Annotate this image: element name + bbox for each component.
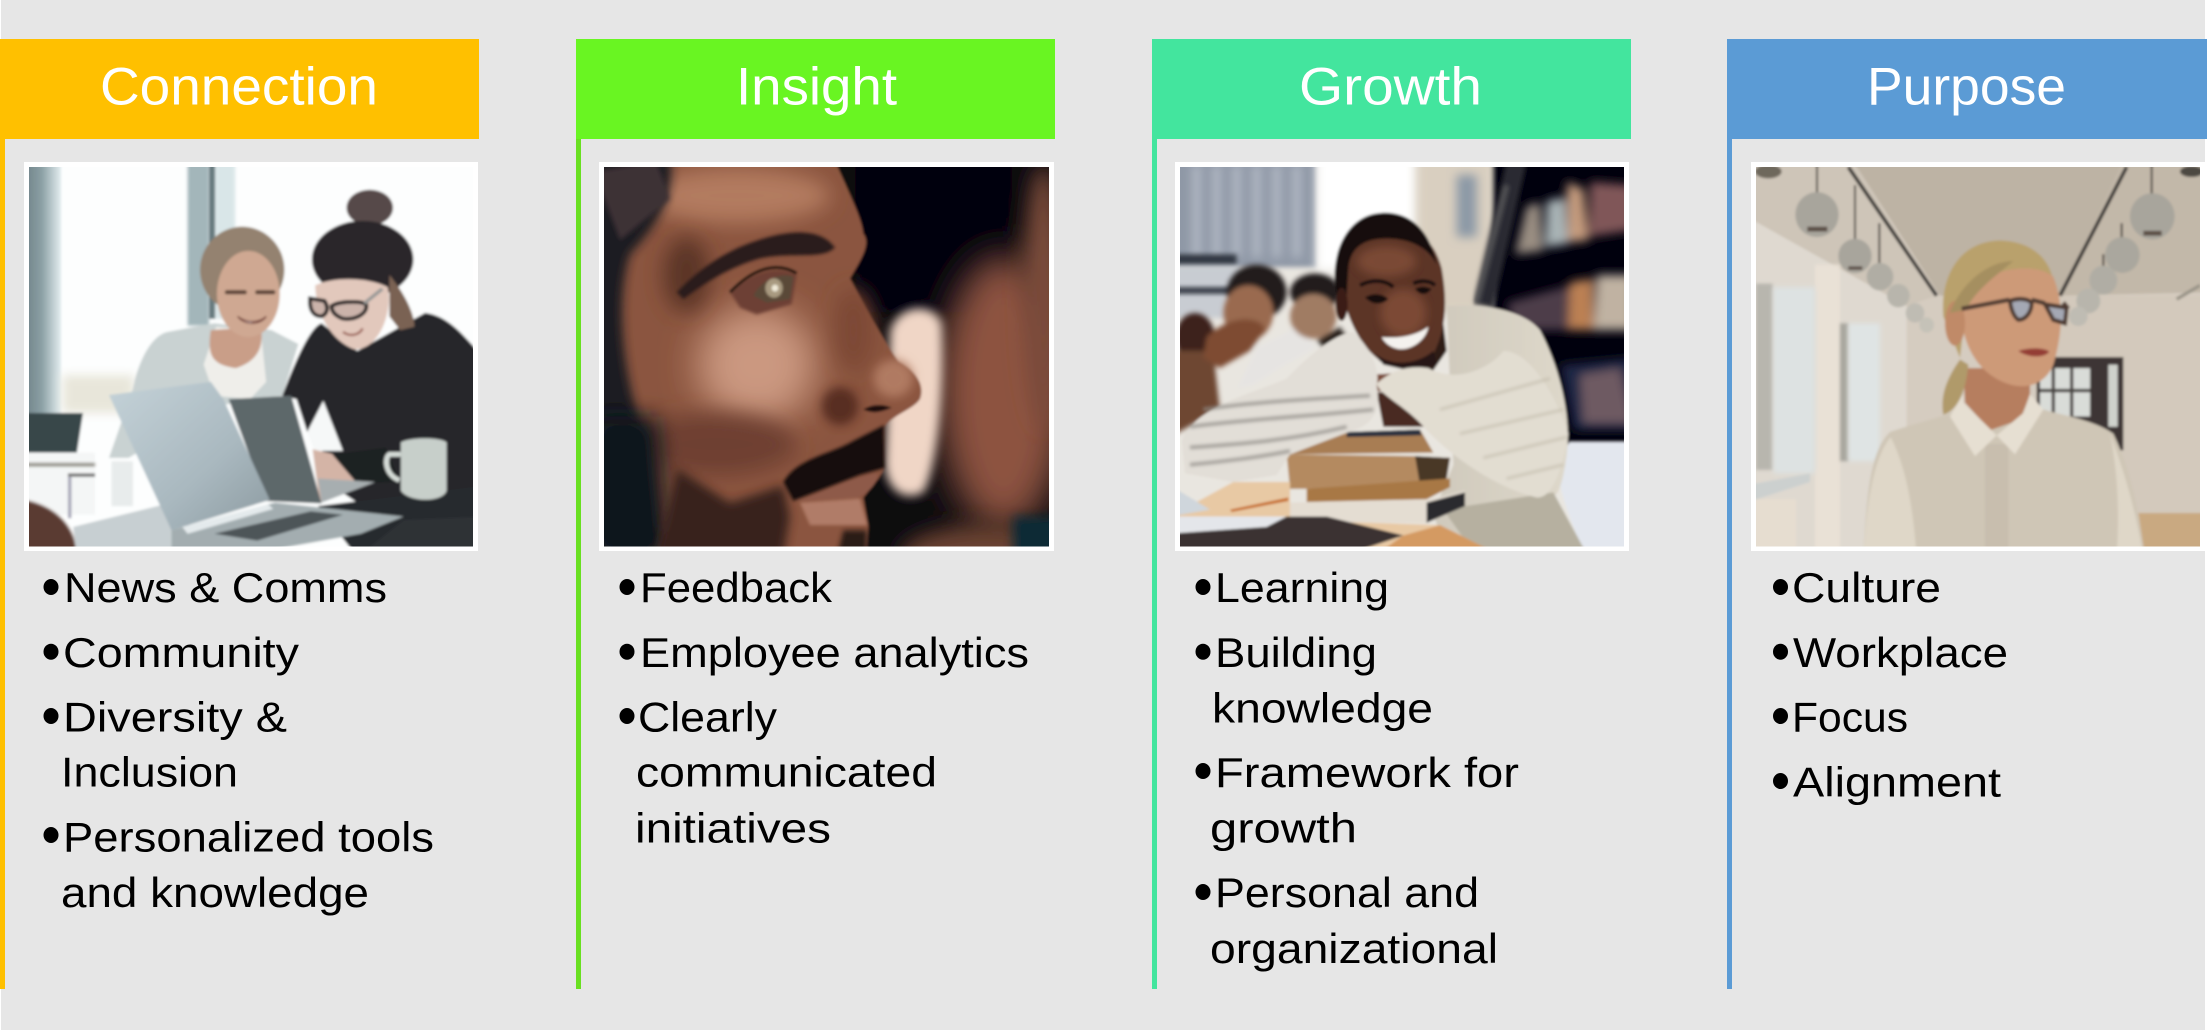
photo: man in profile	[604, 167, 1049, 546]
bullet list: Insight: Clearly	[638, 694, 777, 741]
bullet list: Connection: Personalized tools	[63, 814, 434, 861]
neck, collar	[1963, 368, 2030, 430]
arms and hands	[1327, 373, 1403, 392]
bullet list: Connection: and knowledge	[61, 869, 369, 916]
left woman	[109, 323, 298, 458]
head	[1342, 227, 1445, 366]
photo frame: Growth	[1175, 162, 1629, 551]
mug	[401, 438, 447, 500]
panel: Purpose	[1727, 39, 2207, 989]
panel: Connection	[0, 39, 484, 989]
bullet list: Connection	[44, 564, 434, 916]
head	[1943, 240, 2053, 358]
bullet list: Insight	[620, 564, 1029, 852]
heading: Growth: Growth	[1299, 58, 1482, 116]
lips	[2018, 348, 2049, 356]
bullet list: Insight: initiatives	[635, 805, 831, 852]
bullet list: Growth: growth	[1210, 805, 1357, 852]
panel: Insight	[576, 39, 1067, 989]
panel: Growth	[1152, 39, 1634, 989]
bullet list: Growth: Personal and	[1215, 869, 1479, 916]
heading: Purpose: Purpose	[1867, 58, 2066, 116]
bullet list: Insight: Employee analytics	[640, 629, 1029, 676]
bullet list: Connection: Community	[63, 629, 299, 676]
bullet list: Growth: Building	[1215, 629, 1377, 676]
glasses	[1962, 300, 2068, 309]
photo frame: Insight	[599, 162, 1054, 551]
bullet list: Connection: News & Comms	[64, 564, 387, 611]
ponytail	[1942, 360, 1968, 415]
bullet list: Growth: knowledge	[1212, 685, 1433, 732]
bullet list: Growth: Learning	[1215, 564, 1389, 611]
bullet list: Growth: Framework for	[1215, 749, 1519, 796]
bullet list: Insight: Feedback	[640, 564, 833, 611]
neck shadow	[1353, 296, 1447, 375]
chair	[1557, 442, 1634, 557]
background people	[1170, 265, 1347, 437]
heading: Connection: Connection	[100, 58, 378, 116]
sweater body	[1433, 305, 1587, 557]
right arm	[1377, 351, 1568, 498]
ceiling tracks and pendants	[1848, 167, 2127, 296]
bullet list: Purpose: Workplace	[1793, 629, 2008, 676]
photo frame: Purpose	[1751, 162, 2205, 551]
table	[1170, 482, 1503, 557]
header bar: Insight	[576, 39, 1055, 139]
accent line: Purpose	[1727, 139, 1732, 989]
photo frame: Connection	[24, 162, 478, 551]
left arm	[1182, 332, 1378, 482]
bullet list: Growth	[1196, 564, 1519, 972]
laptops	[307, 401, 343, 451]
photo: man resting on books in a library	[1180, 167, 1624, 546]
bullet list: Connection: Diversity &	[63, 694, 287, 741]
bullet list: Purpose: Culture	[1792, 564, 1941, 611]
bullet list: Purpose: Alignment	[1793, 759, 2001, 806]
right woman	[282, 313, 484, 503]
bullet list: Purpose	[1773, 564, 2008, 806]
photo: woman with glasses in an office	[1756, 167, 2200, 546]
bullet list: Purpose: Focus	[1792, 694, 1908, 741]
far window	[2037, 357, 2123, 450]
accent line: Insight	[576, 139, 581, 989]
accent line: Growth	[1152, 139, 1157, 989]
left wall and windows	[1746, 216, 1907, 557]
header bar: Connection	[0, 39, 479, 139]
header bar: Purpose	[1727, 39, 2207, 139]
bullet list: Connection: Inclusion	[61, 749, 238, 796]
bullet list: Growth: organizational	[1210, 925, 1498, 972]
header bar: Growth	[1152, 39, 1631, 139]
accent line: Connection	[0, 139, 5, 989]
photo: two women at laptops	[29, 167, 473, 546]
blouse	[1863, 410, 2143, 557]
bullet list: Insight: communicated	[636, 749, 937, 796]
books	[1290, 430, 1433, 454]
heading: Insight: Insight	[736, 58, 897, 116]
